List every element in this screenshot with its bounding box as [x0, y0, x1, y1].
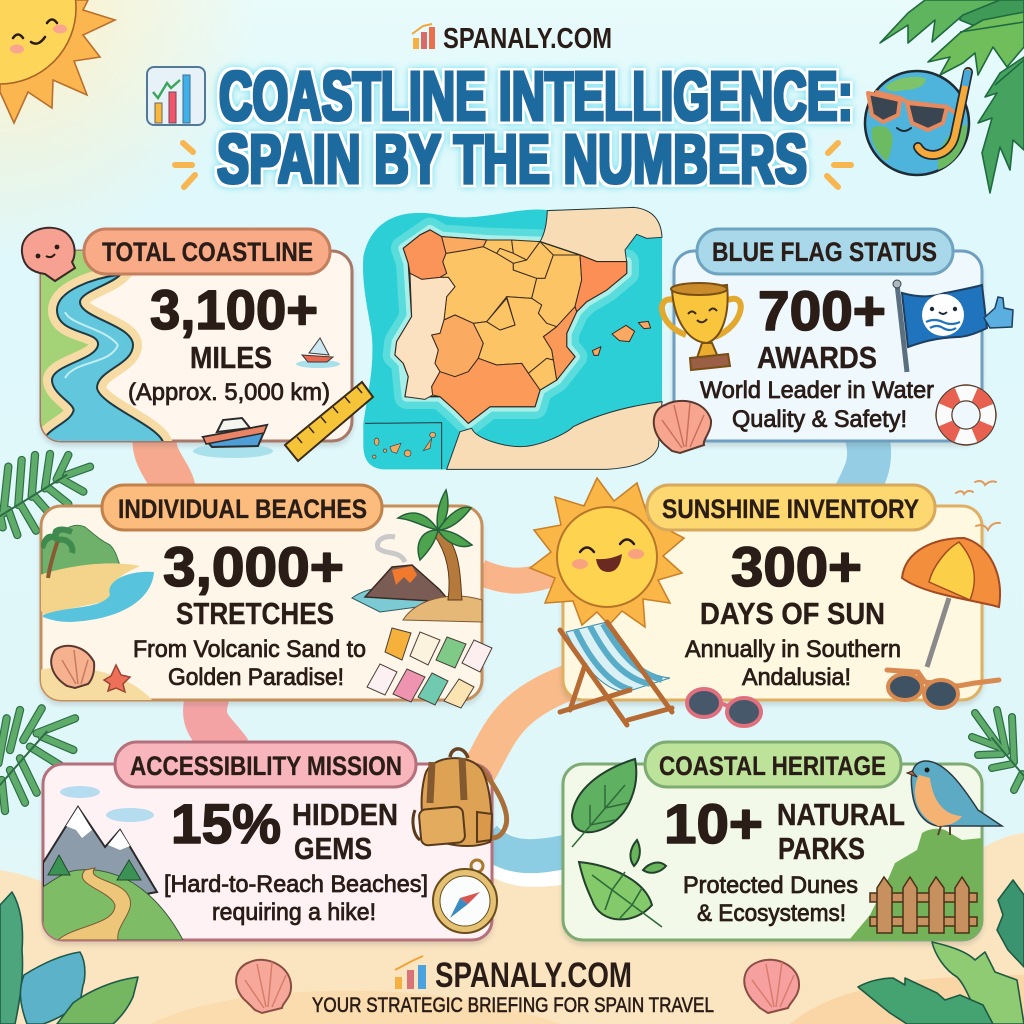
icon: bluebird — [907, 761, 1002, 835]
unit values: 700+ — [758, 279, 886, 342]
illustration: winding river — [41, 251, 163, 442]
note: Andalusia! — [742, 664, 851, 691]
footer brand: SPANALY.COM — [435, 956, 632, 995]
icon: blue flag — [893, 280, 1013, 372]
sea — [363, 207, 662, 469]
card — [674, 251, 982, 441]
card — [43, 764, 492, 940]
unit: GEMS — [294, 831, 372, 866]
note — [164, 871, 428, 926]
icon: backpack — [413, 749, 507, 846]
icon: bottom shell right — [744, 960, 799, 1013]
sparks beside title — [175, 143, 851, 187]
note — [683, 872, 858, 927]
icon: pink sunglasses — [687, 689, 761, 726]
illustration: bush and fence — [849, 829, 982, 940]
panel: accessibility mission — [43, 742, 507, 940]
unit: STRETCHES — [176, 596, 334, 631]
card — [41, 251, 352, 441]
icon: beach umbrella — [902, 538, 1000, 667]
statistic: 3,100+ — [150, 278, 318, 341]
icon: right palm frond — [972, 710, 1024, 790]
footer brand: YOUR STRATEGIC BRIEFING FOR SPAIN TRAVEL — [312, 994, 714, 1017]
unit: NATURAL — [777, 797, 905, 832]
footer brand — [312, 956, 714, 1017]
connector paths between panels — [154, 430, 869, 864]
badge heading: SUNSHINE INVENTORY — [662, 494, 919, 524]
illustration: volcano and palm — [352, 490, 482, 622]
icon: bar chart tile — [147, 67, 205, 125]
unit: DAYS OF SUN — [700, 596, 885, 631]
panel: blue flag status — [662, 229, 1013, 450]
panel: blue flag status: AWARDS — [757, 340, 877, 375]
map of Spain — [363, 207, 662, 469]
icon: compass — [433, 860, 497, 933]
icon: large leaves — [572, 759, 666, 927]
title — [217, 57, 853, 198]
note: (Approx. 5,000 km) — [128, 379, 330, 406]
icon: left palm frond — [0, 454, 90, 535]
illustration: beach towels — [367, 628, 492, 708]
icon: left palm frond lower — [0, 708, 75, 811]
note: Protected Dunes — [683, 872, 858, 899]
icon: ruler — [285, 382, 373, 461]
icon: brand bars top — [412, 24, 435, 49]
icon: deck chair — [560, 622, 672, 725]
sand south — [447, 402, 662, 469]
icon: palm leaves top right — [880, 0, 1024, 193]
icon: orange sunglasses — [887, 670, 999, 708]
illustration: mountains and trail — [43, 786, 183, 940]
badge heading — [115, 742, 416, 787]
icon: smiling sun top left — [0, 0, 115, 123]
Canary inset — [365, 423, 442, 469]
unit: MILES — [190, 340, 272, 375]
note: & Ecosystems! — [697, 900, 846, 927]
statistic: 10+ — [664, 792, 763, 855]
unit — [292, 797, 398, 866]
note — [133, 636, 366, 691]
icon: scallop shell by map — [654, 401, 711, 453]
panel: total coastline — [41, 229, 373, 461]
panel: coastal heritage — [563, 742, 1002, 940]
card — [563, 506, 982, 700]
panel: individual beaches — [40, 485, 492, 708]
land base — [395, 230, 627, 423]
note: Quality & Safety! — [732, 406, 907, 433]
note: World Leader in Water — [700, 377, 934, 404]
note: [Hard-to-Reach Beaches] — [164, 871, 428, 898]
header brand: SPANALY.COM — [443, 23, 612, 55]
badge heading — [647, 485, 935, 530]
unit — [777, 797, 905, 866]
badge heading — [84, 229, 330, 274]
note: requiring a hike! — [212, 899, 376, 926]
badge heading — [697, 229, 953, 274]
note — [700, 377, 934, 433]
icon: big smiling sun — [530, 478, 684, 627]
icon: seagulls — [956, 481, 1000, 530]
icon: life ring — [931, 380, 1001, 450]
unit: HIDDEN — [292, 797, 398, 832]
regions — [395, 230, 651, 423]
note: Golden Paradise! — [168, 664, 344, 691]
icon: bottom shell left — [236, 960, 291, 1013]
foliage bottom right — [858, 880, 1024, 1024]
foliage bottom left — [0, 892, 138, 1024]
unit: PARKS — [778, 831, 865, 866]
illustration: sand, shell, starfish — [40, 646, 152, 702]
badge heading: ACCESSIBILITY MISSION — [130, 751, 402, 781]
icon: motor boat — [193, 418, 273, 458]
badge heading — [645, 742, 901, 787]
note: From Volcanic Sand to — [133, 636, 366, 663]
icon: brand bars bottom — [395, 956, 426, 989]
sand north east — [540, 207, 662, 262]
card — [41, 506, 482, 700]
icon: blob mascot — [22, 228, 75, 281]
icon: trophy — [662, 283, 741, 370]
icon: globe with sunglasses and snorkel — [865, 70, 969, 175]
badge heading: INDIVIDUAL BEACHES — [118, 494, 367, 524]
note: Annually in Southern — [685, 636, 901, 663]
badge heading: BLUE FLAG STATUS — [712, 237, 937, 267]
note — [685, 636, 901, 691]
badge heading: TOTAL COASTLINE — [102, 237, 313, 267]
icon: sailboat — [296, 338, 340, 368]
statistic: 3,000+ — [163, 535, 344, 598]
badge heading — [102, 485, 382, 530]
panel: sunshine inventory — [530, 478, 1000, 726]
illustration: island beach — [40, 525, 154, 622]
badge heading: COASTAL HERITAGE — [659, 751, 886, 781]
card — [563, 764, 982, 940]
statistic: 15% — [171, 792, 281, 855]
statistic: 300+ — [731, 535, 862, 598]
shallow coast halo — [395, 230, 627, 423]
